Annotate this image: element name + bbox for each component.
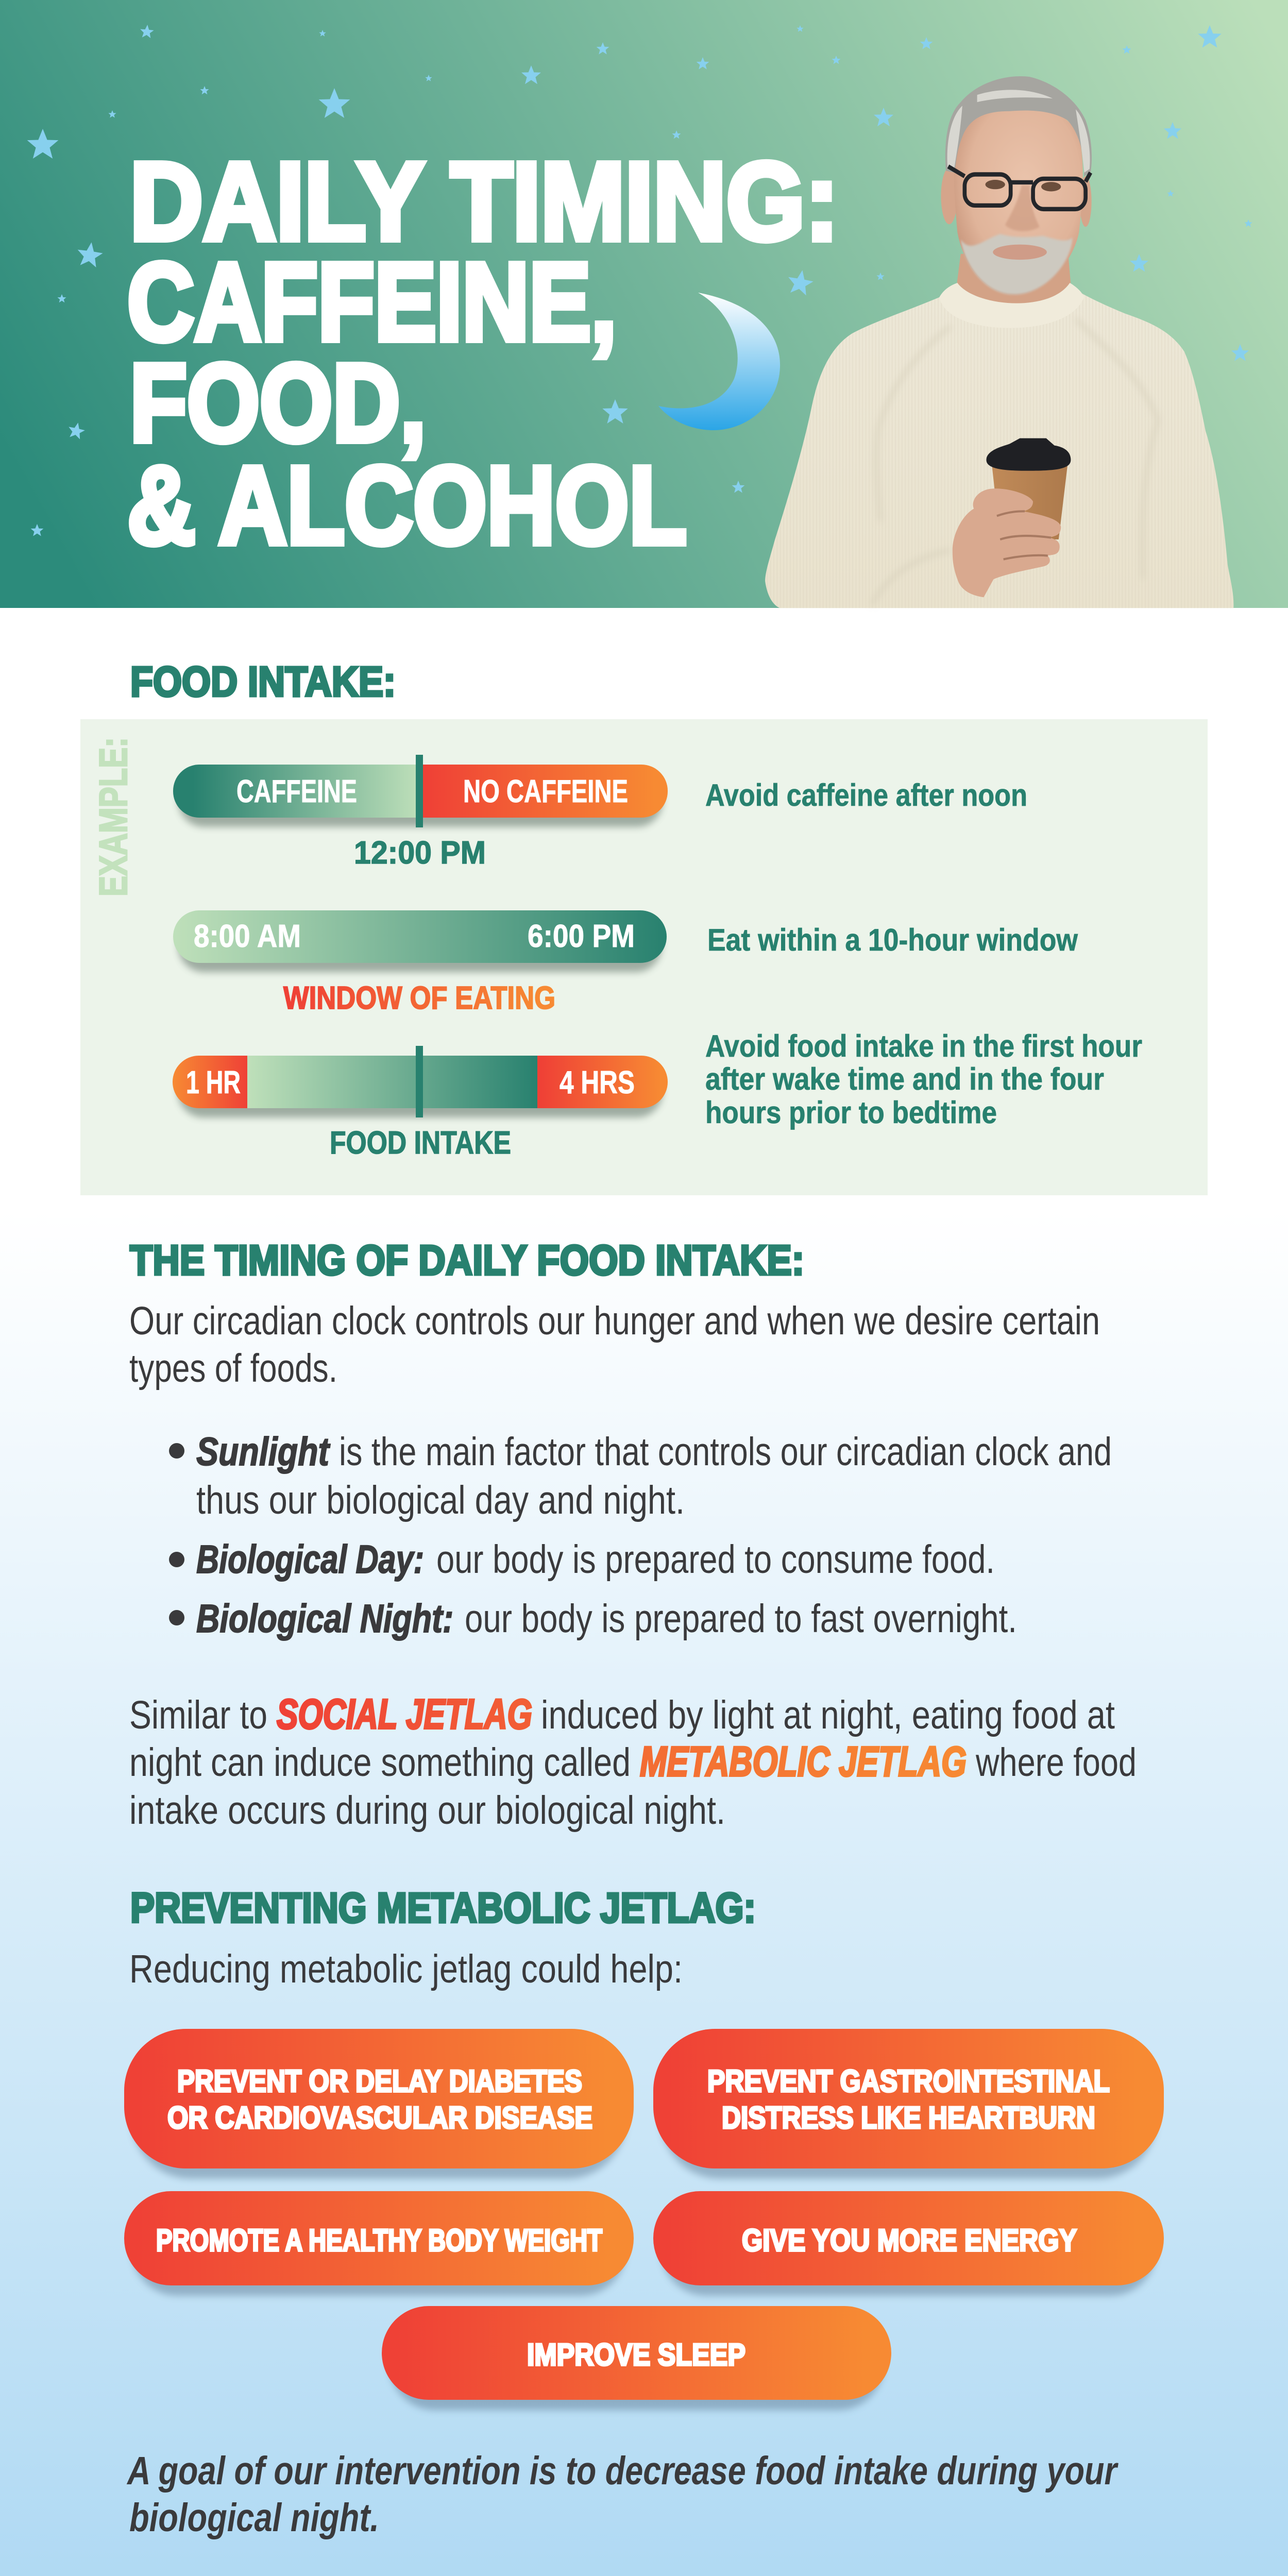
nose xyxy=(1005,185,1040,231)
text: social and metabolic jetlag xyxy=(129,1691,1137,1833)
text: goal of intervention xyxy=(126,2449,1118,2540)
icon: crescent moon xyxy=(658,293,780,430)
hand xyxy=(953,488,1061,597)
bullet: sunlight xyxy=(169,1430,1112,1522)
text: social and metabolic jetlag: intake occurs during our biological night. xyxy=(129,1788,725,1833)
example label: EXAMPLE: xyxy=(92,737,135,896)
neck xyxy=(957,247,1071,304)
bullet: biological night xyxy=(169,1597,1017,1641)
bar: food intake buffer: 1 HR xyxy=(186,1065,241,1100)
glasses xyxy=(948,166,1091,209)
title: CAFFEINE, xyxy=(127,240,617,364)
button: improve sleep: IMPROVE SLEEP xyxy=(527,2337,745,2372)
button: prevent diabetes or cardiovascular disease xyxy=(124,2029,634,2179)
bullet: biological day: Biological Day: xyxy=(196,1537,424,1582)
label: food intake: FOOD INTAKE xyxy=(330,1125,511,1161)
button: give you more energy xyxy=(653,2191,1164,2296)
title xyxy=(127,139,839,567)
button: prevent diabetes or cardiovascular disease: OR CARDIOVASCULAR DISEASE xyxy=(167,2100,592,2135)
coffee cup xyxy=(986,438,1071,539)
sweater knit texture xyxy=(765,275,1233,608)
bullet: biological day xyxy=(169,1537,995,1582)
label: window of eating: WINDOW OF EATING xyxy=(283,980,555,1016)
bar: eating window xyxy=(173,910,667,972)
text: goal of intervention: biological night. xyxy=(129,2496,379,2540)
bar: food intake buffer xyxy=(173,1046,668,1117)
button: promote a healthy body weight: PROMOTE A HEALTHY BODY WEIGHT xyxy=(156,2223,602,2258)
bullet: biological day: our body is prepared to consume food. xyxy=(436,1537,995,1582)
panel: example timelines xyxy=(80,719,1208,1195)
description: food intake buffer: Avoid food intake in the first hour xyxy=(705,1029,1142,1063)
label: 12:00 PM: 12:00 PM xyxy=(354,835,486,871)
bullet: sunlight: is the main factor that controls our circadian clock and xyxy=(339,1430,1112,1474)
button: improve sleep xyxy=(382,2306,891,2410)
heading: the timing of daily food intake: THE TIMING OF DAILY FOOD INTAKE: xyxy=(130,1237,804,1284)
face xyxy=(954,107,1083,294)
text: social and metabolic jetlag: where food xyxy=(975,1740,1137,1785)
description: food intake buffer: hours prior to bedtime xyxy=(705,1095,997,1130)
title: & ALCOHOL xyxy=(127,443,687,567)
sweater collar xyxy=(939,283,1084,328)
button: prevent diabetes or cardiovascular disease: PREVENT OR DELAY DIABETES xyxy=(177,2064,582,2098)
bullet: sunlight: thus our biological day and night. xyxy=(196,1478,685,1522)
text: social and metabolic jetlag: Similar to xyxy=(129,1693,267,1737)
button: prevent gastrointestinal distress: DISTRESS LIKE HEARTBURN xyxy=(722,2100,1095,2135)
ears xyxy=(941,168,957,224)
bullet list: sunlight and biological day and night xyxy=(169,1430,1112,1641)
description: food intake buffer: after wake time and in the four xyxy=(705,1062,1104,1096)
bar: caffeine cut-off xyxy=(173,755,668,827)
heading: preventing metabolic jetlag: PREVENTING METABOLIC JETLAG: xyxy=(130,1885,756,1931)
bullet: sunlight: Sunlight xyxy=(196,1430,331,1474)
text: social and metabolic jetlag: induced by light at night, eating food at xyxy=(541,1693,1115,1737)
text: social and metabolic jetlag: METABOLIC JETLAG xyxy=(640,1738,967,1785)
bullet: biological night: our body is prepared to fast overnight. xyxy=(465,1597,1017,1641)
bar: food intake buffer: 4 HRS xyxy=(560,1065,635,1100)
text: circadian clock intro: Our circadian clock controls our hunger and when we desire certain xyxy=(129,1299,1100,1343)
beard xyxy=(961,234,1073,294)
heading: food intake: FOOD INTAKE: xyxy=(130,658,396,705)
mouth xyxy=(993,245,1047,260)
bullet: biological night: Biological Night: xyxy=(196,1597,453,1641)
sweater shading xyxy=(872,319,1158,604)
text: reducing metabolic jetlag: Reducing metabolic jetlag could help: xyxy=(129,1947,683,1991)
bar: caffeine cut-off: CAFFEINE xyxy=(236,774,357,809)
button: give you more energy: GIVE YOU MORE ENERGY xyxy=(742,2223,1077,2258)
description: food intake buffer xyxy=(705,1029,1142,1130)
text: social and metabolic jetlag: SOCIAL JETLAG xyxy=(277,1691,532,1738)
sweater xyxy=(765,275,1233,608)
text: social and metabolic jetlag: night can induce something called xyxy=(129,1740,631,1785)
eyes xyxy=(986,180,1005,189)
scattered stars xyxy=(27,24,1252,536)
button: prevent gastrointestinal distress xyxy=(653,2029,1164,2179)
text: circadian clock intro: types of foods. xyxy=(129,1346,337,1391)
photo: man holding coffee cup xyxy=(765,76,1233,608)
button: prevent gastrointestinal distress: PREVENT GASTROINTESTINAL xyxy=(707,2064,1110,2098)
description: caffeine: Avoid caffeine after noon xyxy=(705,778,1027,812)
title: DAILY TIMING: xyxy=(130,139,839,263)
description: eating window: Eat within a 10-hour window xyxy=(707,923,1078,957)
text: circadian clock intro xyxy=(129,1299,1100,1391)
hair xyxy=(945,76,1092,176)
bar: eating window: 8:00 AM xyxy=(194,919,301,954)
button: promote a healthy body weight xyxy=(124,2191,634,2296)
hero banner xyxy=(0,0,1288,608)
bar: eating window: 6:00 PM xyxy=(528,919,635,954)
bar: caffeine cut-off: NO CAFFEINE xyxy=(463,774,628,809)
title: FOOD, xyxy=(130,341,426,465)
